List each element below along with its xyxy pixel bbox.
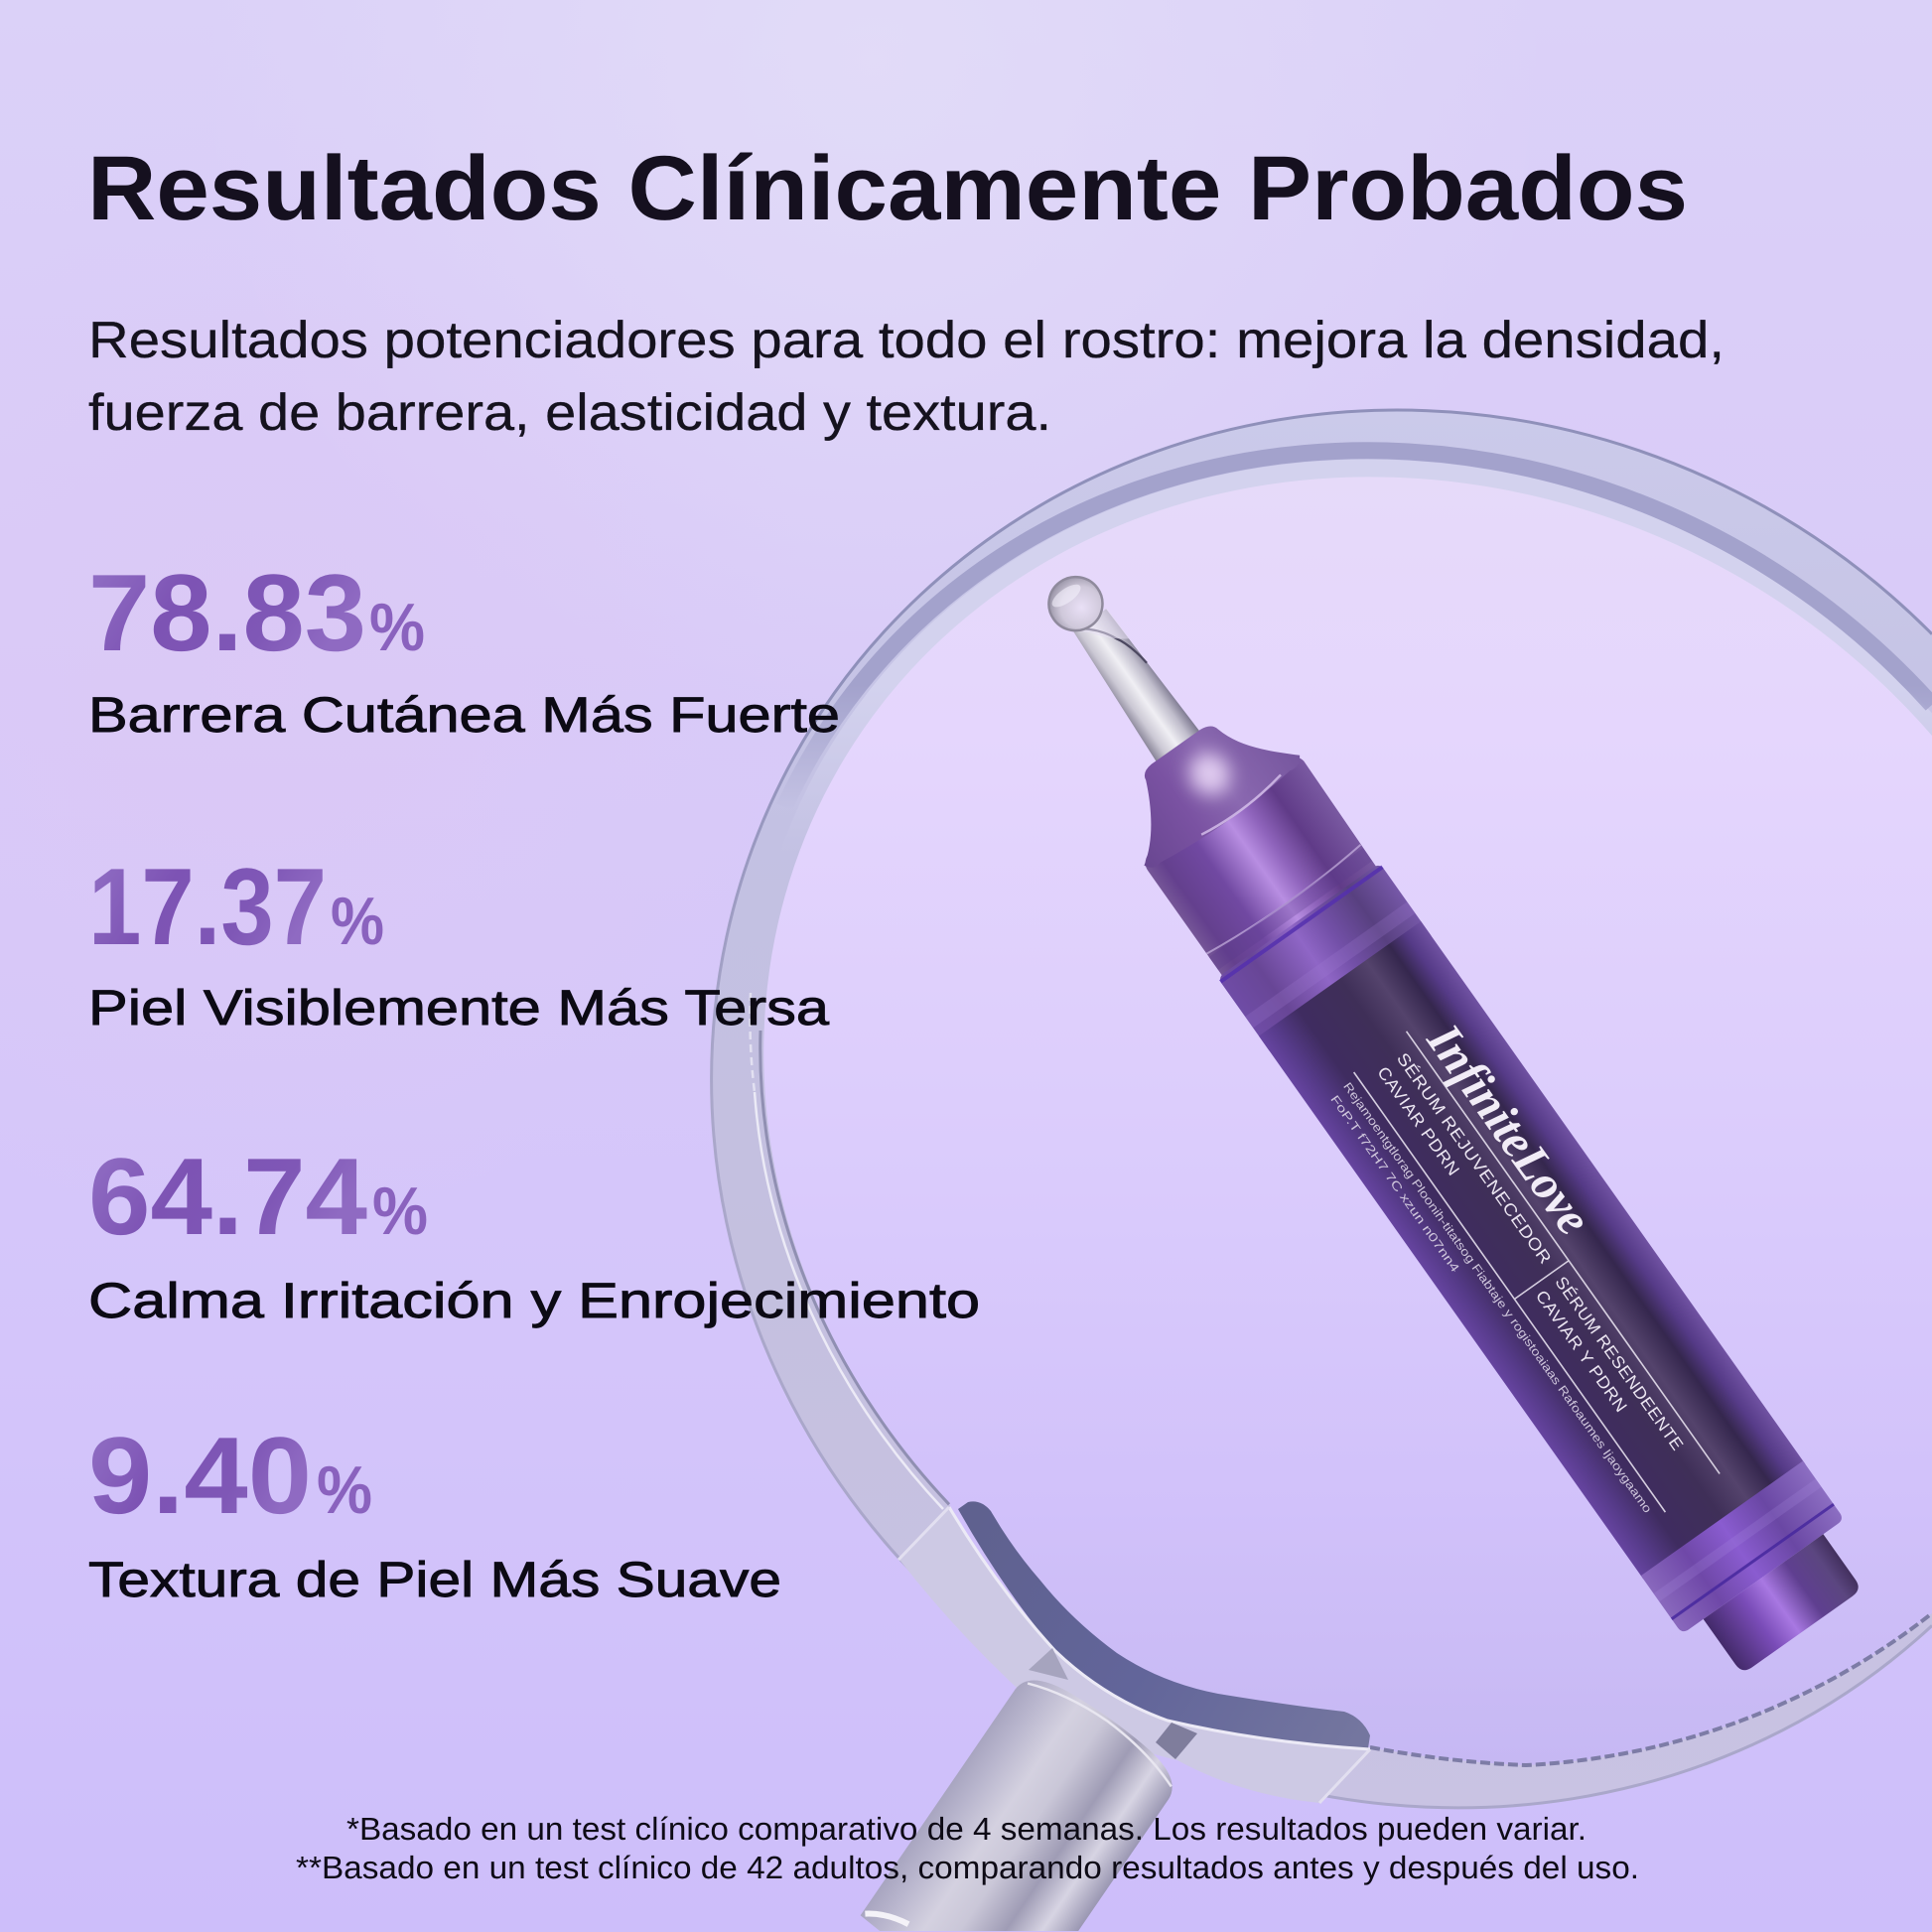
- stat: barrier: Barrera Cutánea Más Fuerte: [88, 687, 840, 743]
- stat: barrier: %: [369, 590, 425, 665]
- stat: irritation: [88, 1136, 980, 1328]
- stat: barrier: 78.83: [88, 552, 366, 674]
- ring collar: segment seams: [898, 1507, 1370, 1803]
- product name right: CAVIAR Y PDRN: [1532, 1287, 1631, 1416]
- stat: smoother skin: Piel Visiblemente Más Tersa: [88, 980, 829, 1035]
- subtitle: [88, 312, 1725, 442]
- pen label: [1321, 999, 1765, 1534]
- ring collar: dark inner band: [958, 1501, 1370, 1748]
- stat: irritation: 64.74: [88, 1136, 367, 1258]
- product: serum pen: [978, 525, 1883, 1689]
- product name left: SÉRUM REJUVENECEDOR: [1393, 1049, 1555, 1268]
- title: Resultados Clínicamente Probados: [87, 138, 1688, 239]
- footnotes: *Basado en un test clínico comparativo de 4 semanas. Los resultados pueden variar.: [346, 1811, 1587, 1847]
- subtitle: fuerza de barrera, elasticidad y textura.: [88, 384, 1051, 442]
- small print: Rejamoentgtlorag Ploonih-titatsog Fiabtaje y rogistoaiaas Rafoaumes Ijaoygaamo: [1340, 1080, 1655, 1516]
- subtitle: Resultados potenciadores para todo el rostro: mejora la densidad,: [88, 312, 1725, 369]
- pen base cap: [1704, 1534, 1863, 1674]
- pen metal collar: [1099, 691, 1379, 978]
- pen sleeve: [1217, 863, 1845, 1634]
- small print: [1326, 1080, 1655, 1526]
- stat: texture: 9.40: [88, 1415, 312, 1537]
- stat: irritation: %: [372, 1173, 428, 1249]
- stat: irritation: Calma Irritación y Enrojecimiento: [88, 1273, 980, 1328]
- ring lower-left edge highlights: [750, 993, 949, 1509]
- magnifier ring: [712, 410, 1932, 1808]
- pen glass applicator: [1038, 566, 1204, 769]
- footnotes: [296, 1811, 1639, 1885]
- product name right: SÉRUM RESENDEENTE: [1551, 1273, 1687, 1454]
- ring collar: light segments: [899, 1507, 1370, 1803]
- magnifier handle: [860, 1665, 1187, 1932]
- stat: smoother skin: %: [331, 884, 384, 959]
- footnotes: **Basado en un test clínico de 42 adultos, comparando resultados antes y después del uso.: [296, 1850, 1639, 1885]
- ring lower-right edge: [1370, 1613, 1932, 1765]
- brand name: InfiniteLove: [1416, 1013, 1602, 1244]
- small print: FoP.T f72H7 7C xzun n07nn4: [1327, 1092, 1462, 1275]
- stat: smoother skin: 17.37: [88, 846, 327, 968]
- stat: smoother skin: [88, 846, 829, 1035]
- magnifying glass: [712, 410, 1932, 1808]
- product name left: CAVIAR PDRN: [1373, 1063, 1463, 1179]
- magnifier lens: [763, 477, 1932, 1765]
- stat: texture: %: [317, 1452, 372, 1528]
- stat: texture: Textura de Piel Más Suave: [88, 1552, 781, 1607]
- product name left: [1373, 1049, 1555, 1282]
- stat: barrier: [88, 552, 840, 743]
- stat: texture: [88, 1415, 781, 1607]
